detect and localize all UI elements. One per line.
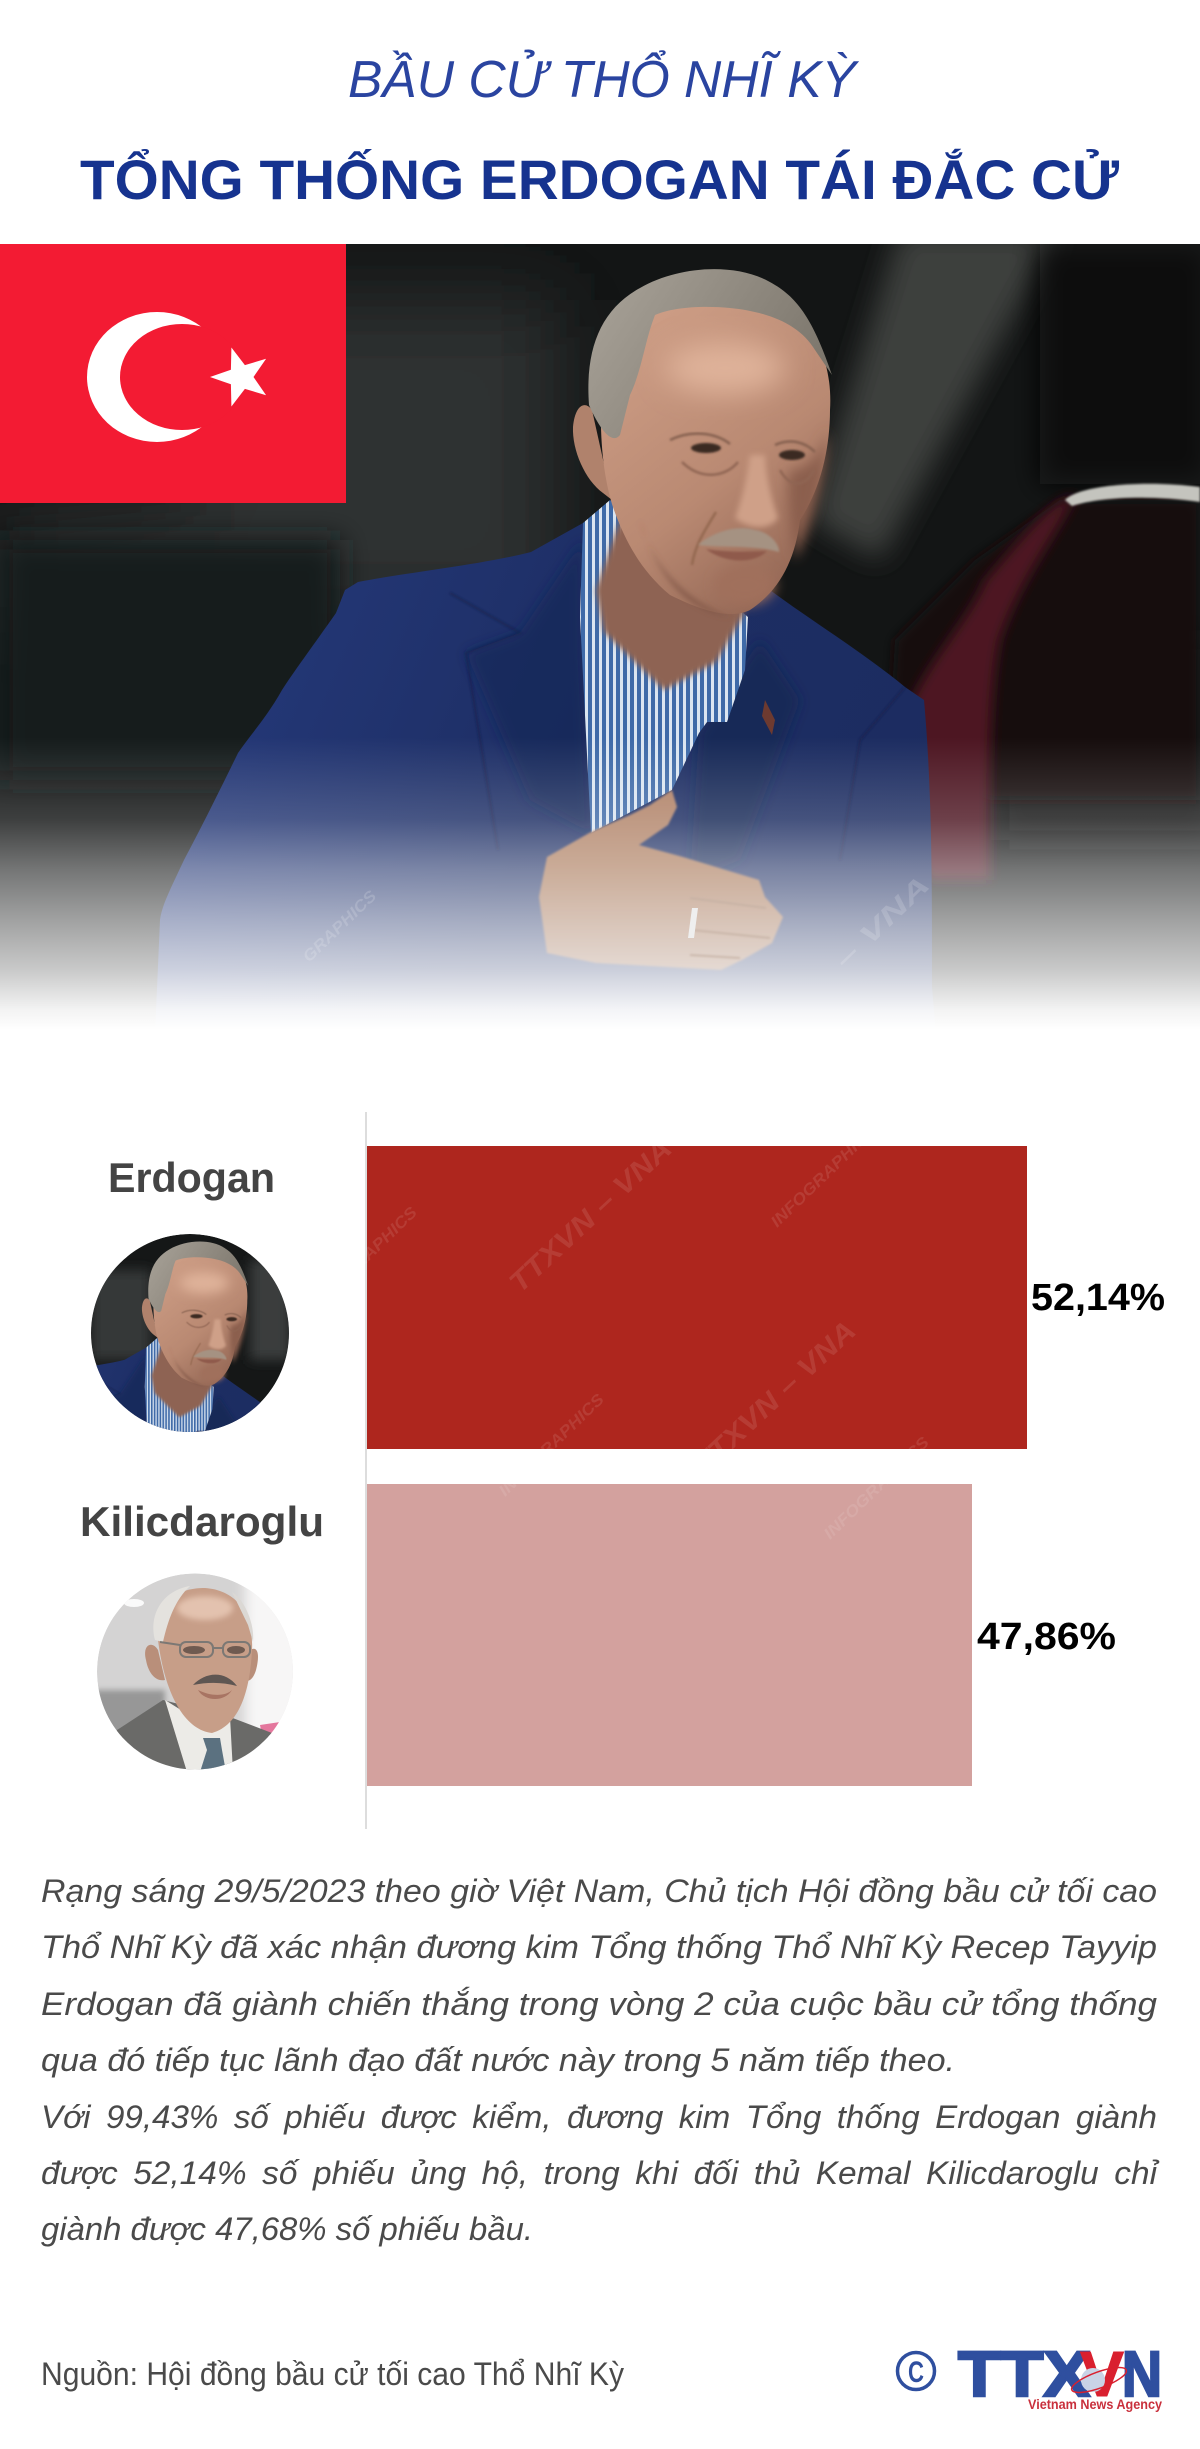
watermarks: INFOGRAPHICS xyxy=(496,1391,608,1500)
photo watermarks: GRAPHICS xyxy=(300,887,380,966)
photo watermarks xyxy=(300,869,935,974)
bar: Erdogan xyxy=(367,1146,1027,1449)
copyright mark xyxy=(898,2352,934,2390)
watermarks: INFOGRAPHICS xyxy=(309,1204,421,1313)
watermarks: TTXVN – VNA xyxy=(503,1132,678,1298)
value: Kilicdaroglu: 47,86% xyxy=(977,1616,1116,1658)
value: Erdogan: 52,14% xyxy=(1031,1277,1165,1319)
candidate name: Kilicdaroglu: Kilicdaroglu xyxy=(80,1498,324,1545)
article text xyxy=(41,1873,1160,2247)
hand over the chest xyxy=(539,790,783,970)
portrait: Erdogan xyxy=(91,1234,289,1432)
chart axis xyxy=(365,1112,367,1829)
lapel pin xyxy=(762,700,775,735)
portrait: Kilicdaroglu xyxy=(95,1573,305,1775)
globe emblem xyxy=(1069,2363,1129,2397)
article text: Với 99,43% số phiếu được kiểm, đương kim Tổng thống Erdogan giành xyxy=(41,2099,1157,2135)
wordmark: N xyxy=(1122,2338,1162,2410)
article text: được 52,14% số phiếu ủng hộ, trong khi đối thủ Kemal Kilicdaroglu chỉ xyxy=(41,2155,1160,2191)
logo: TTXVN Vietnam News Agency xyxy=(898,2338,1162,2412)
watermarks: INFOGRAPHICS xyxy=(768,1122,880,1231)
copyright mark: C xyxy=(908,2356,924,2389)
candidate name: Erdogan: Erdogan xyxy=(108,1154,275,1201)
photo watermarks: – VNA xyxy=(828,869,935,974)
watermarks: INFOGRAPHICS xyxy=(821,1434,933,1543)
wordmark: V xyxy=(1080,2338,1124,2410)
bar: Kilicdaroglu xyxy=(367,1484,972,1786)
wordmark xyxy=(958,2338,1162,2410)
flag of Turkey xyxy=(0,244,346,503)
bar chart: election results xyxy=(366,1112,1165,1829)
article text: qua đó tiếp tục lãnh đạo đất nước này trong 5 năm tiếp theo. xyxy=(41,2042,955,2078)
white fade at the bottom of the photo xyxy=(0,753,1200,1034)
watermarks: TTXVN – VNA xyxy=(687,1314,862,1480)
hero photo: president Erdogan against dark background xyxy=(0,230,1200,1034)
article text: Thổ Nhĩ Kỳ đã xác nhận đương kim Tổng thống Thổ Nhĩ Kỳ Recep Tayyip xyxy=(41,1929,1157,1965)
article text: Rạng sáng 29/5/2023 theo giờ Việt Nam, Chủ tịch Hội đồng bầu cử tối cao xyxy=(41,1873,1157,1909)
agency name: Vietnam News Agency xyxy=(1028,2397,1162,2412)
source note: Nguồn: Hội đồng bầu cử tối cao Thổ Nhĩ Kỳ xyxy=(41,2356,624,2392)
article text: Erdogan đã giành chiến thắng trong vòng 2 của cuộc bầu cử tổng thống xyxy=(41,1986,1157,2022)
title: election subtitle: BẦU CỬ THỔ NHĨ KỲ xyxy=(348,49,859,109)
watermarks xyxy=(309,1122,933,1543)
title: main heading: TỔNG THỐNG ERDOGAN TÁI ĐẮC CỬ xyxy=(80,148,1120,211)
wordmark: TTX xyxy=(958,2338,1090,2410)
article text: giành được 47,68% số phiếu bầu. xyxy=(41,2211,533,2247)
